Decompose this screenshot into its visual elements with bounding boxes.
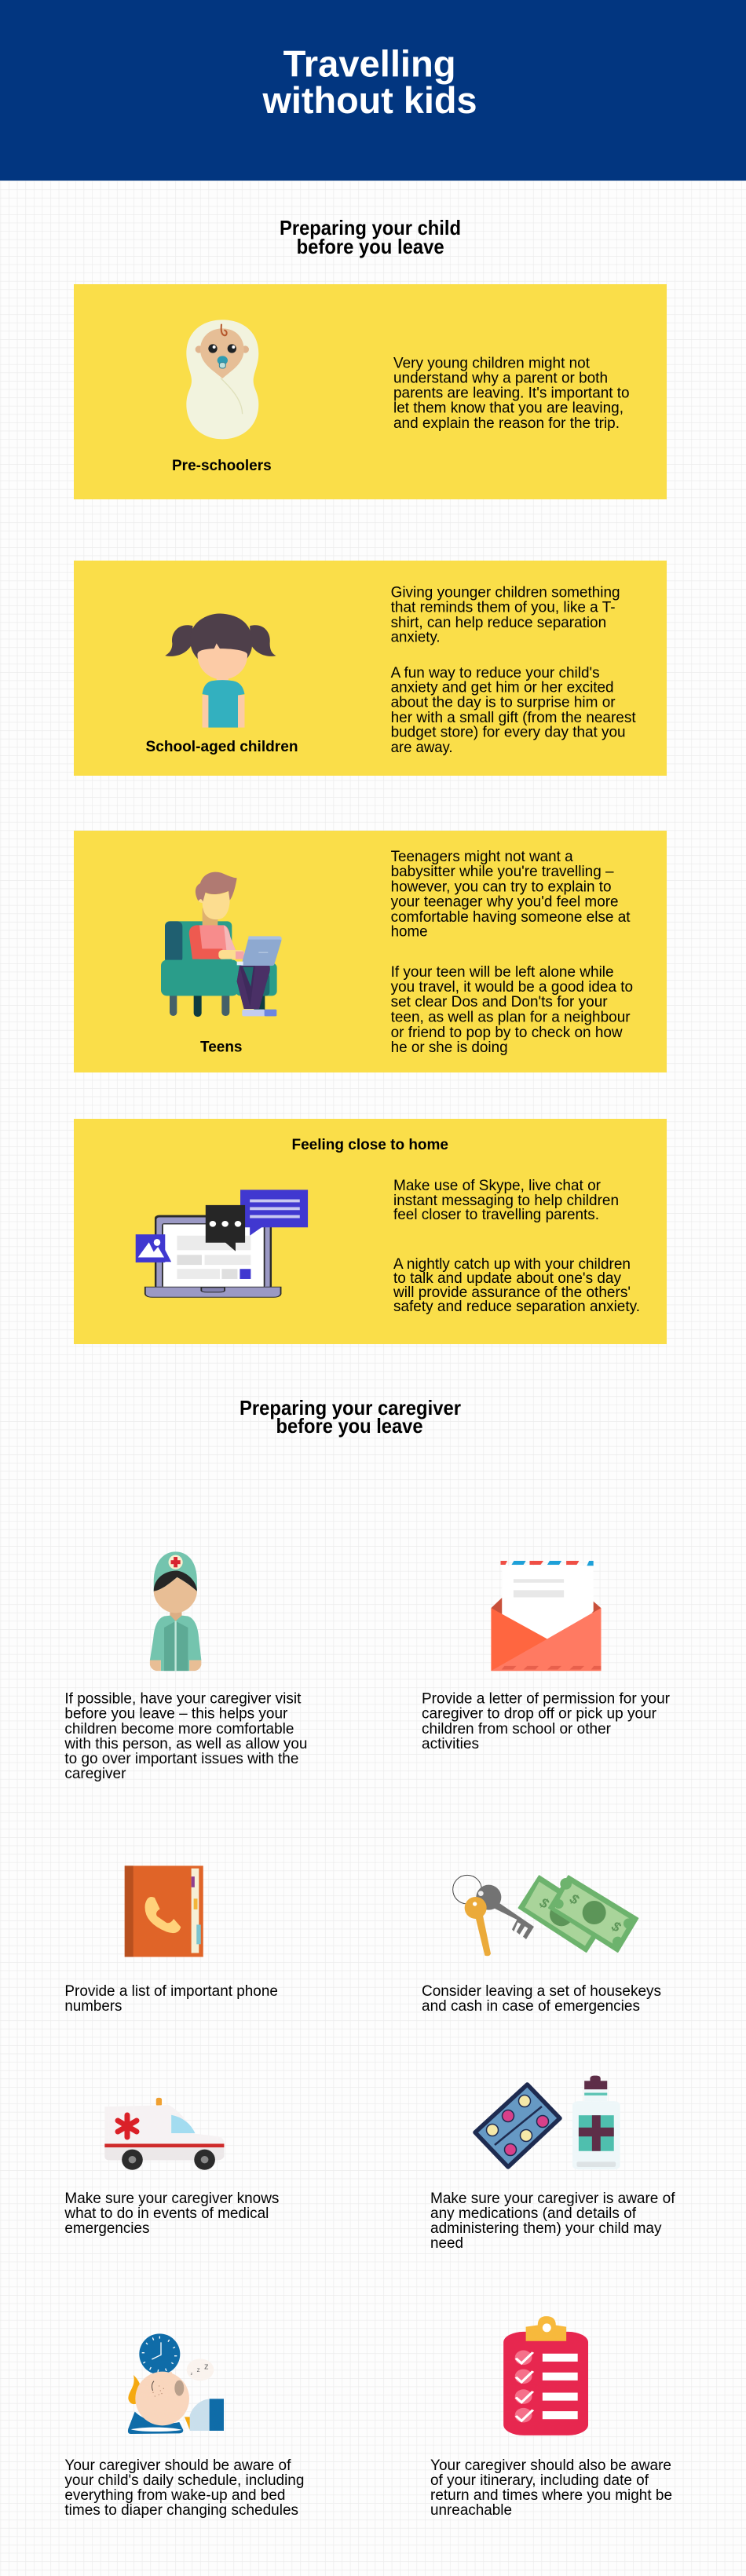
text: caregiver visit: children become more comfortable [64, 1720, 294, 1737]
icon: ambulance [104, 2098, 224, 2170]
text: school-aged advice: Giving younger children something [391, 584, 620, 601]
heading: preparing your child [280, 216, 461, 258]
item: phone numbers [64, 1865, 278, 2015]
text: staying in touch advice: will provide assurance of the others' [393, 1284, 631, 1301]
text: itinerary: return and times where you might be [430, 2486, 672, 2504]
text: medical emergencies: Make sure your caregiver knows [64, 2190, 280, 2207]
text: pre-schoolers advice: let them know that you are leaving, [393, 400, 623, 417]
text: school-aged advice: budget store) for every day that you [391, 724, 626, 741]
icon: keys and banknotes: $ [609, 1917, 623, 1935]
text: school-aged advice: are away. [391, 739, 453, 756]
heading: preparing your child: before you leave [297, 235, 444, 258]
heading: preparing your child: Preparing your child [280, 216, 461, 239]
text: caregiver visit [64, 1690, 307, 1782]
text: daily schedule [64, 2457, 304, 2519]
text: medications: any medications (and details of [430, 2205, 637, 2222]
panel: teens [74, 831, 667, 1072]
text: staying in touch advice: feel closer to travelling parents. [393, 1206, 599, 1223]
text: medications: need [430, 2234, 463, 2252]
text: itinerary: unreachable [430, 2501, 512, 2519]
text: letter of permission: Provide a letter of permission for your [422, 1690, 670, 1708]
text: teens advice: If your teen will be left alone while [391, 963, 614, 981]
text: teens advice: babysitter while you're travelling – [391, 863, 614, 880]
text: school-aged advice: that reminds them of you, like a T- [391, 599, 616, 616]
item: caregiver visit [64, 1551, 307, 1782]
icon: keys and banknotes: $ [536, 1894, 552, 1912]
text: medications [430, 2190, 675, 2252]
icon: clipboard checklist [503, 2316, 588, 2435]
text: staying in touch advice: safety and reduce separation anxiety. [393, 1298, 640, 1315]
text: school-aged advice: anxiety and get him or her excited [391, 678, 614, 696]
text: letter of permission: caregiver to drop off or pick up your [422, 1705, 656, 1723]
label: school-aged children: School-aged children [146, 738, 298, 755]
text: pre-schoolers advice: parents are leaving. It's important to [393, 385, 630, 402]
text: caregiver visit: to go over important issues with the [64, 1750, 298, 1767]
text: letter of permission [422, 1690, 670, 1752]
text: daily schedule: your child's daily schedule, including [64, 2472, 304, 2489]
text: caregiver visit: If possible, have your caregiver visit [64, 1690, 302, 1708]
icon: pills and bottle [475, 2076, 620, 2169]
text: staying in touch advice [393, 1177, 640, 1315]
text: teens advice: teen, as well as plan for a neighbour [391, 1009, 631, 1026]
text: daily schedule: times to diaper changing schedules [64, 2501, 298, 2519]
panel: school-aged children [74, 561, 667, 776]
icon: envelope with letter [491, 1561, 601, 1671]
text: itinerary: Your caregiver should also be aware [430, 2457, 671, 2474]
text: staying in touch advice: to talk and update about one's day [393, 1270, 621, 1287]
text: phone numbers: numbers [64, 1997, 123, 2015]
item: letter of permission [422, 1561, 670, 1752]
text: itinerary: of your itinerary, including date of [430, 2472, 649, 2489]
icon: swaddled baby [186, 320, 258, 439]
text: teens advice: however, you can try to explain to [391, 878, 612, 895]
icon: laptop with chat bubbles [136, 1189, 308, 1297]
text: staying in touch advice: A nightly catch up with your children [393, 1255, 631, 1273]
text: daily schedule: everything from wake-up and bed [64, 2486, 285, 2504]
text: staying in touch advice: Make use of Skype, live chat or [393, 1177, 601, 1194]
text: medical emergencies: emergencies [64, 2220, 150, 2237]
text: pre-schoolers advice: Very young children might not [393, 354, 591, 371]
icon: sleeping baby with clock [128, 2333, 224, 2434]
item: housekeys and cash [422, 1875, 661, 2015]
heading: preparing your caregiver: before you leave [276, 1414, 422, 1438]
text: teens advice: or friend to pop by to check on how [391, 1024, 623, 1041]
text: teens advice: comfortable having someone else at [391, 908, 631, 926]
text: itinerary [430, 2457, 672, 2519]
icon: keys and banknotes [453, 1875, 638, 1956]
heading: feeling close to home: Feeling close to home [292, 1136, 448, 1153]
title: Travelling [283, 42, 456, 85]
text: letter of permission: activities [422, 1735, 479, 1752]
text: teens advice: he or she is doing [391, 1039, 508, 1056]
item: daily schedule [64, 2333, 304, 2519]
text: staying in touch advice: instant messaging to help children [393, 1192, 619, 1209]
heading: preparing your caregiver [240, 1396, 461, 1438]
text: school-aged advice: A fun way to reduce your child's [391, 664, 600, 681]
text: pre-schoolers advice [393, 354, 630, 432]
panel: feeling close to home [74, 1119, 667, 1344]
header banner [0, 0, 746, 181]
text: medical emergencies: what to do in events of medical [64, 2205, 269, 2222]
title: without kids [262, 79, 477, 121]
text: medications: administering them) your child may [430, 2220, 662, 2237]
icon: sleeping baby with clock: z [191, 2372, 193, 2377]
text: teens advice: Teenagers might not want a [391, 848, 573, 865]
icon: nurse [150, 1551, 201, 1671]
text: caregiver visit: with this person, as well as allow you [64, 1735, 307, 1752]
icon: sleeping baby with clock: z [197, 2366, 200, 2373]
text: caregiver visit: caregiver [64, 1765, 126, 1782]
item: medications [430, 2076, 675, 2252]
text: housekeys and cash: and cash in case of emergencies [422, 1997, 640, 2015]
text: teens advice: your teenager why you'd feel more [391, 893, 619, 911]
icon: phone book [125, 1865, 203, 1957]
item: medical emergencies [64, 2098, 280, 2237]
icon: girl with pigtails [165, 614, 276, 728]
text: pre-schoolers advice: and explain the reason for the trip. [393, 415, 620, 432]
text: school-aged advice: shirt, can help reduce separation [391, 614, 606, 631]
icon: keys and banknotes: $ [566, 1890, 582, 1908]
label: pre-schoolers: Pre-schoolers [172, 457, 272, 474]
label: teens: Teens [200, 1038, 243, 1055]
text: school-aged advice: about the day is to surprise him or [391, 694, 616, 711]
text: school-aged advice: anxiety. [391, 629, 441, 646]
text: housekeys and cash [422, 1982, 661, 2015]
text: caregiver visit: before you leave – this helps your [64, 1705, 288, 1723]
text: school-aged advice [391, 584, 636, 756]
item: itinerary [430, 2316, 672, 2519]
text: medical emergencies [64, 2190, 280, 2237]
text: medications: Make sure your caregiver is aware of [430, 2190, 675, 2207]
text: teens advice: you travel, it would be a good idea to [391, 978, 633, 996]
title [262, 42, 477, 121]
text: phone numbers [64, 1982, 278, 2015]
text: teens advice: home [391, 923, 428, 941]
panel: pre-schoolers [74, 284, 667, 499]
text: daily schedule: Your caregiver should be aware of [64, 2457, 291, 2474]
text: teens advice: set clear Dos and Don'ts for your [391, 993, 608, 1010]
text: letter of permission: children from school or other [422, 1720, 611, 1737]
text: school-aged advice: her with a small gift (from the nearest [391, 709, 636, 726]
text: housekeys and cash: Consider leaving a set of housekeys [422, 1982, 661, 2000]
text: phone numbers: Provide a list of important phone [64, 1982, 278, 2000]
heading: preparing your caregiver: Preparing your caregiver [240, 1396, 461, 1420]
text: pre-schoolers advice: understand why a parent or both [393, 369, 608, 386]
text: teens advice [391, 848, 633, 1056]
icon: teen on armchair with laptop [161, 872, 282, 1017]
icon: sleeping baby with clock: z [204, 2362, 209, 2371]
